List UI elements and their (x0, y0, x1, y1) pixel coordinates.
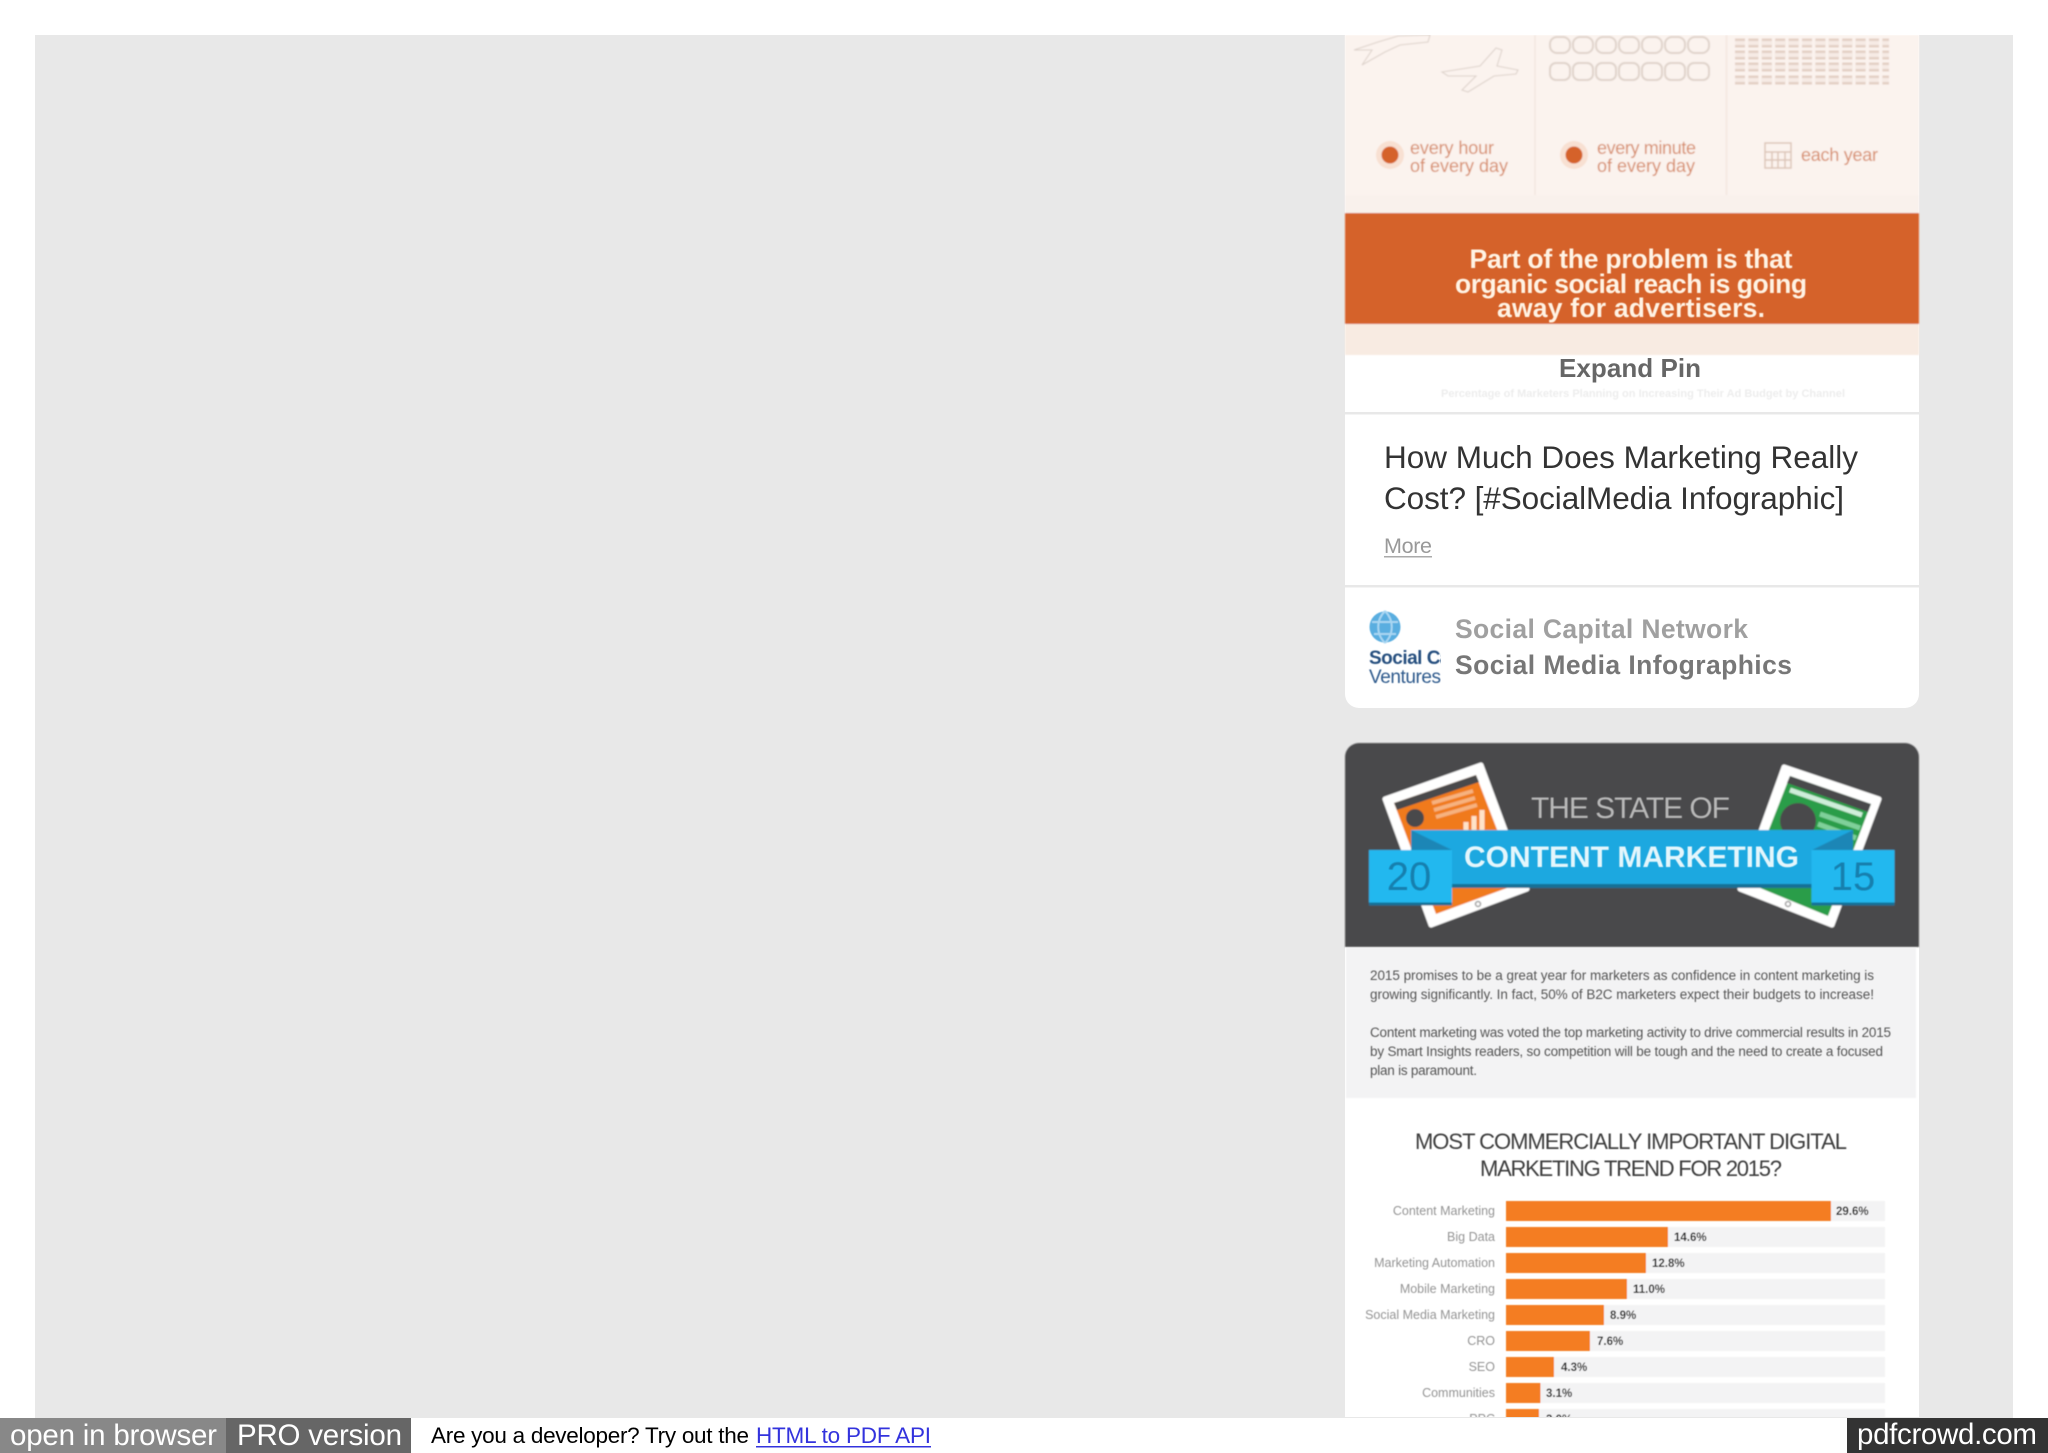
lower peach band (1345, 324, 1919, 355)
label: of every day (1410, 156, 1508, 176)
orange banner (1345, 213, 1919, 324)
value labels (1546, 1206, 1869, 1426)
ribbon end right (1812, 850, 1894, 903)
open in browser button: open in browser (10, 1419, 217, 1452)
pdfcrowd badge: pdfcrowd.com (1857, 1418, 2037, 1451)
user name: Social Capital Network (1455, 614, 1748, 644)
legend: every minute (1560, 138, 1696, 176)
white footer strip (0, 1418, 2048, 1453)
intro paragraphs: 2015 promises to be a great year for marketers as confidence in content marketing is (1370, 968, 1874, 983)
banner text: away for advertisers. (1497, 293, 1765, 323)
bar chart (1365, 1201, 1885, 1429)
panel: first pin card (1345, 35, 1919, 708)
label: every minute (1597, 138, 1696, 158)
banner text (1455, 244, 1807, 323)
category labels: Communities (1422, 1386, 1495, 1400)
pro version button: PRO version (237, 1419, 402, 1452)
icon: orange tablet (1385, 765, 1527, 925)
small tablet buttons (1476, 902, 1790, 906)
chart heading (1415, 1129, 1847, 1181)
link text: More (1384, 534, 1432, 558)
value labels: 7.6% (1597, 1336, 1623, 1348)
infographic image fragment (1345, 35, 1919, 355)
logo wordmark: Social Capital (1369, 648, 1487, 669)
icon: globe (1370, 611, 1400, 643)
value labels: 3.1% (1546, 1388, 1572, 1400)
column dividers (1535, 35, 1726, 195)
category labels (1365, 1204, 1495, 1426)
ribbon fold right (1812, 830, 1853, 850)
category labels: Social Media Marketing (1365, 1308, 1495, 1322)
category labels: Mobile Marketing (1400, 1282, 1495, 1296)
heading: the state of: THE STATE OF (1531, 792, 1730, 825)
banner text: organic social reach is going (1455, 269, 1807, 299)
divider (1345, 585, 1919, 588)
logo wordmark (1368, 649, 1441, 684)
category labels: Big Data (1447, 1230, 1495, 1244)
value labels: 8.9% (1610, 1310, 1636, 1322)
dark header background (1345, 743, 1919, 947)
card white body (1345, 35, 1919, 708)
label: of every day (1597, 156, 1695, 176)
chart heading: MOST COMMERCIALLY IMPORTANT DIGITAL (1415, 1129, 1847, 1154)
ribbon centre (1411, 830, 1853, 885)
bar tracks (1506, 1201, 1885, 1429)
pin title: Cost? [#SocialMedia Infographic] (1384, 480, 1844, 516)
logo wordmark: Ventures (1369, 667, 1441, 688)
heading: content marketing: CONTENT MARKETING (1464, 841, 1799, 874)
category labels: Marketing Automation (1374, 1256, 1495, 1270)
icon: orange dot (1560, 141, 1588, 169)
api link: HTML to PDF API (756, 1423, 931, 1448)
value labels: 4.3% (1561, 1362, 1587, 1374)
value labels: 29.6% (1836, 1206, 1869, 1218)
value labels: 12.8% (1652, 1258, 1685, 1270)
bars (1506, 1201, 1831, 1429)
band between legend and banner (1345, 195, 1919, 213)
header text (1387, 792, 1875, 899)
value labels: 11.0% (1633, 1284, 1665, 1296)
ribbon end shadows (1369, 902, 1894, 906)
pin title: How Much Does Marketing Really (1384, 439, 1858, 475)
icon: calendar (1765, 143, 1791, 168)
divider (1345, 412, 1919, 414)
intro paragraphs: Content marketing was voted the top marketing activity to drive commercial results in 2015 (1370, 1025, 1891, 1040)
banner text: Part of the problem is that (1470, 244, 1793, 274)
value labels: 3.0% (1546, 1414, 1572, 1426)
category labels: PPC (1469, 1412, 1495, 1426)
icon: grid of small dots (1735, 43, 1889, 80)
year 15: 15 (1831, 855, 1875, 899)
infographic header (1345, 743, 1919, 1098)
faint image caption: Percentage of Marketers Planning on Increasing Their Ad Budget by Channel (1441, 388, 1845, 400)
intro paragraphs: by Smart Insights readers, so competition will be tough and the need to create a focused (1370, 1044, 1883, 1059)
source text (1455, 614, 1792, 680)
year 20: 20 (1387, 855, 1431, 899)
icon: orange dot (1376, 141, 1404, 169)
legend: each year (1765, 143, 1878, 168)
icon: green tablet (1740, 767, 1879, 925)
category labels: CRO (1467, 1334, 1495, 1348)
card white body (1345, 743, 1919, 1420)
underline (1384, 556, 1432, 558)
label: each year (1801, 145, 1878, 165)
ribbon fold left (1411, 830, 1452, 850)
legend: every hour (1376, 138, 1508, 176)
board name: Social Media Infographics (1455, 650, 1792, 680)
source logo (1368, 610, 1441, 684)
chart heading: MARKETING TREND FOR 2015? (1480, 1156, 1782, 1181)
more link (1384, 538, 1432, 558)
developer prompt: Are you a developer? Try out the (431, 1423, 749, 1448)
section under the header (1346, 948, 1916, 1098)
label: every hour (1410, 138, 1494, 158)
intro paragraphs (1370, 968, 1891, 1078)
footer bar (0, 1418, 2048, 1453)
intro paragraphs: plan is paramount. (1370, 1063, 1477, 1078)
image background (1345, 35, 1919, 195)
icon: airplanes (1354, 35, 1518, 92)
expand pin label: Expand Pin (1559, 353, 1701, 383)
intro paragraphs: growing significantly. In fact, 50% of B2C marketers expect their budgets to increase! (1370, 987, 1874, 1002)
category labels: Content Marketing (1393, 1204, 1495, 1218)
value labels: 14.6% (1674, 1232, 1707, 1244)
category labels: SEO (1469, 1360, 1495, 1374)
ribbon end left (1369, 850, 1452, 903)
panel: second pin card (1345, 743, 1919, 1429)
ribbon lower shadow (1452, 884, 1812, 888)
icon: grid of rounded squares (1550, 37, 1709, 80)
